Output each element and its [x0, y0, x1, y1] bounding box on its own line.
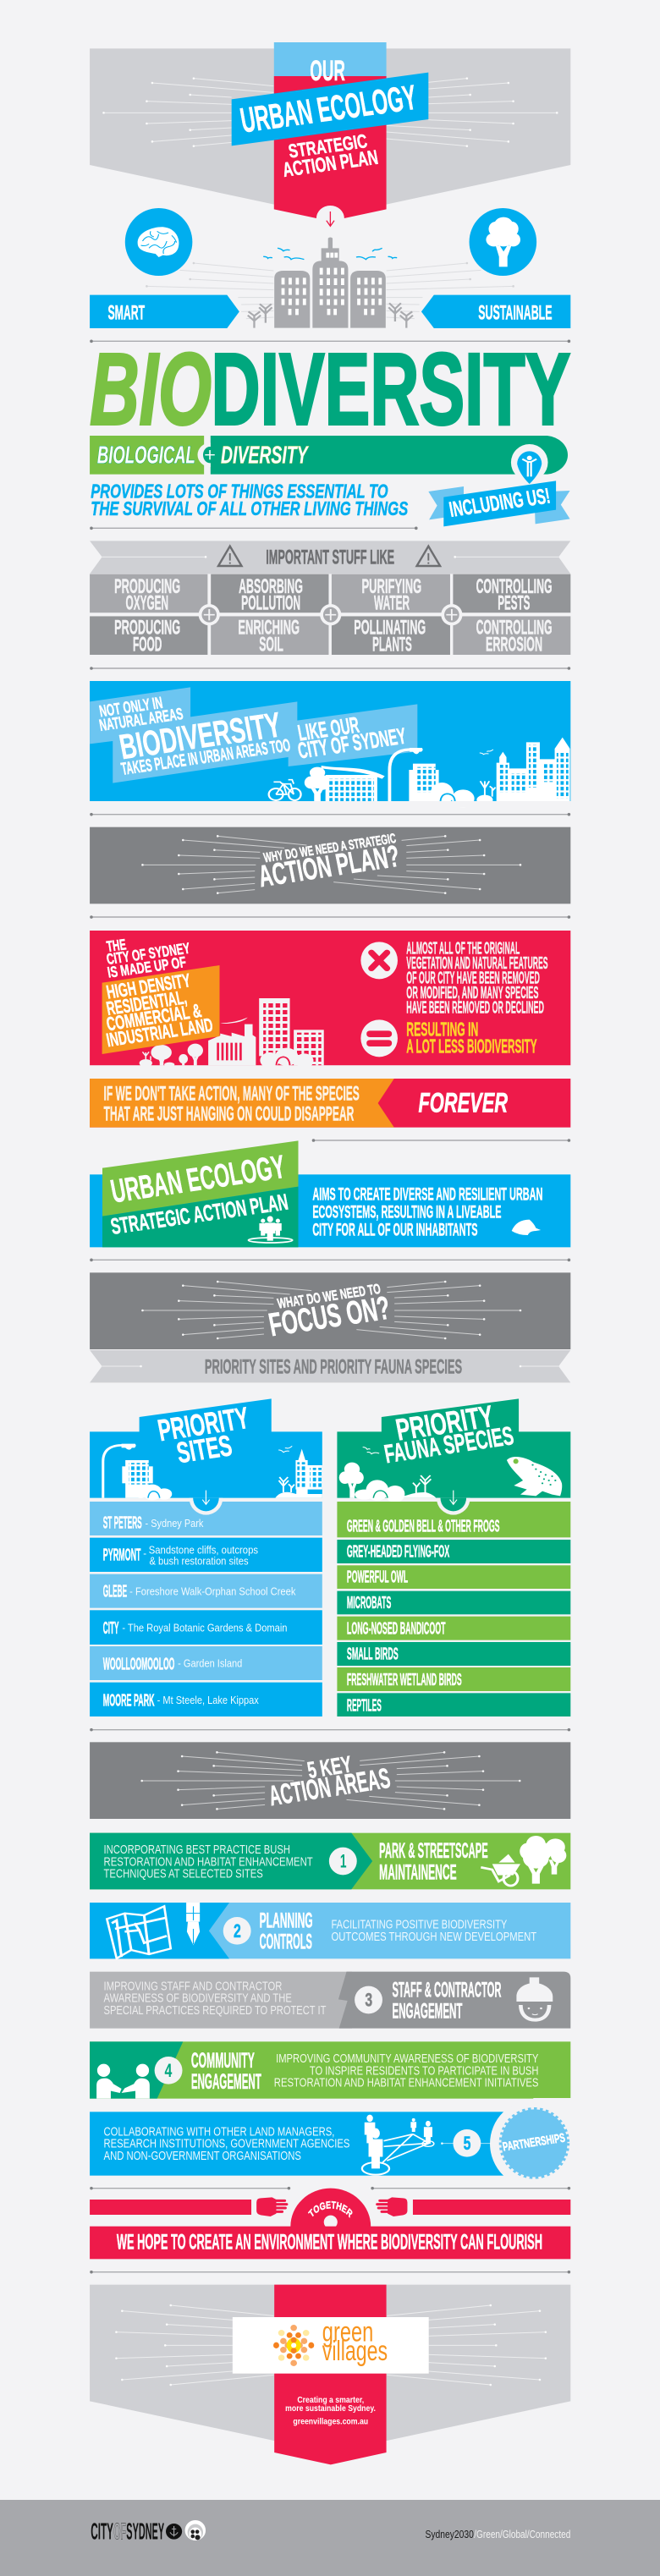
action 1: park and streetscape maintainence [90, 1833, 570, 1889]
panel: why do we need a strategic action plan [90, 827, 570, 904]
arch: together: TOGETHER [308, 2201, 352, 2218]
logo text: green villages: villages [322, 2335, 388, 2366]
text: what do we need to: WHAT DO WE NEED TO [276, 1281, 382, 1311]
title: MAINTAINENCE [379, 1859, 457, 1884]
teal block: STRATEGIC ACTION PLAN [109, 1189, 290, 1239]
text: the city of sydney is made up of: CITY OF SYDNEY [105, 940, 191, 969]
action 2: planning controls [90, 1903, 570, 1958]
grid: benefits [90, 574, 570, 656]
text: almost all of the original [406, 939, 548, 1017]
fauna rows: FRESHWATER WETLAND BIRDS [347, 1670, 462, 1689]
panel: priority sites [90, 1398, 322, 1716]
icon: bicycle wheels [269, 788, 301, 800]
text: the city of sydney is made up of: IS MADE UP OF [106, 953, 188, 981]
text: aims [312, 1184, 542, 1239]
panel: why do we need a strategic action plan: ACTION PLAN? [256, 839, 403, 894]
plus connectors [199, 604, 463, 625]
text: like our city of sydney: LIKE OUR [296, 712, 361, 746]
description: IMPROVING STAFF AND CONTRACTOR [104, 1980, 282, 1993]
title: ENGAGEMENT [392, 1998, 463, 2023]
ribbon: including us: INCLUDING US! [447, 483, 552, 521]
site rows: & bush restoration sites [149, 1555, 249, 1567]
rays [116, 2305, 546, 2385]
description: COLLABORATING WITH OTHER LAND MANAGERS, [104, 2125, 334, 2139]
starburst badge [501, 2109, 567, 2177]
action 2: planning controls: PLANNING [260, 1908, 313, 1932]
description [274, 2052, 539, 2090]
number 2 [223, 1917, 251, 1945]
action 4: community engagement: COMMUNITY [191, 2048, 255, 2073]
description: TECHNIQUES AT SELECTED SITES [104, 1868, 263, 1881]
fauna rows [337, 1502, 570, 1716]
description: INCORPORATING BEST PRACTICE BUSH [104, 1843, 290, 1857]
grid: benefits: CONTROLLING [476, 615, 552, 639]
title: action plan: ACTION PLAN [281, 146, 380, 182]
grid: benefits: POLLINATING [354, 615, 426, 639]
title: priority fauna species [382, 1400, 516, 1469]
action 3: staff and contractor engagement [90, 1972, 570, 2029]
text: the city of sydney is made up of [105, 936, 191, 981]
title: priority sites [155, 1401, 252, 1469]
fauna rows: POWERFUL OWL [347, 1568, 408, 1586]
description: OUTCOMES THROUGH NEW DEVELOPMENT [332, 1931, 536, 1944]
fauna rows: SMALL BIRDS [347, 1645, 399, 1663]
banner: important stuff like [90, 541, 570, 574]
description [332, 1919, 536, 1944]
icon: brain [125, 208, 192, 276]
title: priority fauna species: FAUNA SPECIES [382, 1420, 516, 1469]
orange ribbon: land use: RESIDENTIAL, [105, 987, 189, 1019]
site rows: - Foreshore Walk-Orphan School Creek [129, 1586, 296, 1597]
site rows: ST PETERS [103, 1513, 142, 1532]
icon: person pin [511, 444, 548, 484]
site rows: - Mt Steele, Lake Kippax [157, 1694, 259, 1706]
banner: sustainable [421, 295, 570, 328]
light blue tab [274, 42, 387, 93]
icon: map [107, 1906, 171, 1958]
description: AWARENESS OF BIODIVERSITY AND THE [104, 1992, 292, 2005]
text: focus on: FOCUS ON? [266, 1288, 393, 1343]
site rows: CITY [103, 1618, 119, 1638]
banner: smart [90, 295, 239, 328]
description [104, 1843, 313, 1881]
logo: green villages mark [273, 2325, 314, 2366]
blue band [90, 1174, 570, 1247]
action 4: community engagement: ENGAGEMENT [191, 2069, 261, 2094]
site rows: - Garden Island [178, 1658, 242, 1669]
header shape [90, 1398, 322, 1498]
description: IMPROVING COMMUNITY AWARENESS OF BIODIVERSITY [276, 2052, 539, 2066]
description: FACILITATING POSITIVE BIODIVERSITY [332, 1919, 508, 1931]
number 5 [442, 2129, 491, 2157]
icon: equals [360, 1019, 398, 1057]
site rows: MOORE PARK [103, 1691, 155, 1710]
footer logos and tagline: SYDNEY [126, 2519, 164, 2545]
site rows: - The Royal Botanic Gardens & Domain [122, 1623, 287, 1634]
panel: urban biodiversity: TAKES PLACE IN URBAN AREAS TOO [119, 735, 292, 779]
grid: benefits: PESTS [498, 590, 530, 614]
grid: benefits: PURIFYING [361, 574, 421, 598]
grid: benefits: ERROSION [486, 632, 542, 656]
number 4: 4 [164, 2061, 173, 2082]
description: SPECIAL PRACTICES REQUIRED TO PROTECT IT [104, 2004, 327, 2018]
grid: benefits: OXYGEN [126, 590, 168, 614]
header rays [104, 79, 557, 146]
header shape [337, 1398, 570, 1498]
logo: sydney 2030 badge [185, 2520, 206, 2540]
site rows [90, 1502, 322, 1716]
header: our urban ecology strategic action plan: OUR [310, 54, 345, 86]
green ribbon [102, 1140, 298, 1217]
icon: leaf [512, 1220, 541, 1235]
red pennant [274, 76, 387, 218]
orange ribbon: land use: HIGH DENSITY [105, 970, 192, 1003]
band: biological [90, 436, 204, 475]
starburst badge: PARTNERSHIPS [502, 2131, 566, 2154]
banner: we hope to create [90, 2227, 570, 2259]
number 2: 2 [234, 1921, 241, 1942]
banner: priority sites and priority fauna species [90, 1350, 570, 1382]
section: priorities [90, 1398, 570, 1716]
section: 5 key action areas [90, 1730, 570, 2029]
light ribbons [90, 687, 417, 783]
grid: benefits: PRODUCING [114, 574, 180, 598]
logo: city of sydney: OF [113, 2519, 126, 2545]
action 5: partnerships [90, 2098, 579, 2189]
city rays [146, 263, 514, 319]
icon: frog [507, 1457, 562, 1496]
arrow notch [190, 1491, 223, 1515]
description: TO INSPIRE RESIDENTS TO PARTICIPATE IN BUSH [310, 2064, 538, 2078]
orange ribbon: land use [102, 965, 220, 1054]
grey header banner [90, 48, 570, 205]
title [392, 1977, 502, 2023]
action 4: community engagement [90, 2041, 570, 2099]
skyline illustration [305, 738, 570, 808]
title: priority fauna species: PRIORITY [393, 1400, 497, 1447]
heading: bio: BIO [90, 332, 212, 447]
title [260, 1908, 313, 1953]
blue background [90, 681, 570, 801]
number 3 [355, 1986, 382, 2013]
band: diversity [211, 436, 568, 475]
header: our urban ecology strategic action plan [90, 42, 570, 328]
red pennant [274, 2285, 387, 2464]
orange ribbon: land use: COMMERCIAL & [105, 1000, 203, 1035]
panel: 5 key action areas heading: 5 KEY [305, 1751, 355, 1783]
description: AND NON-GOVERNMENT ORGANISATIONS [104, 2150, 301, 2163]
icon: people network [362, 2115, 434, 2175]
icon: birds [263, 248, 397, 260]
text: creating a smarter: Creating a smarter, [297, 2396, 364, 2405]
section: why an action plan is needed [90, 931, 570, 1128]
text: biodiversity: BIODIVERSITY [117, 706, 284, 766]
grid: benefits: CONTROLLING [476, 574, 552, 598]
icon: people [249, 1216, 293, 1243]
grid: benefits: SOIL [259, 632, 283, 656]
icon: bicycle [273, 780, 294, 794]
ribbon: including us [428, 481, 570, 526]
text: not only in natural areas: NOT ONLY IN [98, 694, 164, 721]
icon: city buildings [274, 237, 386, 328]
tagline: /Green/Global/Connected [474, 2529, 570, 2540]
banner: smart: SMART [107, 302, 145, 324]
icon: cross [360, 942, 398, 979]
banner: important stuff like: IMPORTANT STUFF LIKE [266, 545, 394, 568]
rays [142, 1282, 520, 1338]
number 1 [329, 1848, 357, 1875]
teal block [102, 1187, 298, 1247]
description: RESTORATION AND HABITAT ENHANCEMENT INITIATIVES [274, 2077, 538, 2090]
fauna rows: LONG-NOSED BANDICOOT [347, 1619, 446, 1638]
grey panel [90, 1272, 570, 1349]
icon: hands [256, 2197, 407, 2216]
illustration: city and industry [140, 998, 324, 1068]
arch: together [290, 2188, 371, 2227]
icon: pen [184, 1903, 201, 1945]
text: creating a smarter: greenvillages.com.au [293, 2417, 368, 2426]
site rows: - Sydney Park [146, 1518, 204, 1530]
action 1: park and streetscape maintainence: PARK & STREETSCAPE [379, 1838, 488, 1863]
text: provides lots [91, 481, 408, 520]
grey banner [90, 2285, 570, 2441]
text: not only in natural areas: NATURAL AREAS [98, 705, 184, 735]
footer logos and tagline [91, 2519, 570, 2545]
band: biological: BIOLOGICAL [97, 441, 195, 469]
text: provides lots: PROVIDES LOTS OF THINGS ESSENTIAL TO [91, 481, 388, 503]
footer banner: green villages [90, 2285, 570, 2464]
band: diversity: DIVERSITY [221, 441, 309, 469]
site rows: GLEBE [103, 1582, 127, 1601]
description: RESEARCH INSTITUTIONS, GOVERNMENT AGENCIES [104, 2138, 349, 2150]
icon: handshake [96, 2064, 150, 2099]
site rows: PYRMONT [103, 1546, 141, 1564]
banner: forever [90, 1079, 570, 1128]
text: provides lots: THE SURVIVAL OF ALL OTHER LIVING THINGS [91, 498, 408, 520]
orange ribbon: land use: INDUSTRIAL LAND [105, 1014, 215, 1052]
description [104, 1980, 327, 2018]
grid: benefits: POLLUTION [241, 590, 300, 614]
grid: benefits: ABSORBING [239, 574, 303, 598]
logo: city of sydney: CITY [91, 2519, 113, 2545]
text: the city of sydney is made up of: THE [106, 936, 128, 956]
text: creating a smarter [285, 2396, 376, 2426]
footer bar [0, 2500, 660, 2576]
panel: urban ecology strategic action plan [90, 1140, 570, 1260]
site rows: Sandstone cliffs, outcrops [149, 1544, 258, 1556]
logo: city of sydney [91, 2519, 182, 2545]
site rows: WOOLLOOMOOLOO [103, 1655, 174, 1673]
logo text: green villages: green [322, 2316, 373, 2348]
title: priority sites: SITES [174, 1429, 234, 1469]
panel: 5 key action areas heading: ACTION AREAS [266, 1762, 393, 1812]
text: like our city of sydney [296, 712, 408, 764]
icon: tree [470, 208, 536, 276]
title [379, 1838, 488, 1884]
panel: urban biodiversity [90, 668, 570, 917]
action 2: planning controls: CONTROLS [260, 1929, 312, 1953]
number 3: 3 [365, 1991, 372, 2011]
number 5: 5 [464, 2134, 470, 2155]
description: RESTORATION AND HABITAT ENHANCEMENT [104, 1855, 313, 1869]
green ribbon: URBAN ECOLOGY [107, 1148, 289, 1210]
tagline: Sydney2030 [425, 2529, 474, 2540]
arrow down [327, 211, 334, 226]
title: strategic: STRATEGIC [287, 131, 369, 162]
text: creating a smarter: more sustainable Sydney. [285, 2404, 376, 2414]
number 4 [155, 2057, 183, 2084]
icon: hard hat [516, 1977, 553, 2020]
grid: benefits: ENRICHING [238, 615, 300, 639]
banner: forever: FOREVER [418, 1088, 508, 1118]
tagline [425, 2529, 570, 2540]
text: not only in natural areas [98, 694, 184, 735]
site rows: - [143, 1547, 146, 1559]
fauna rows: MICROBATS [347, 1593, 391, 1612]
banner: sustainable: SUSTAINABLE [478, 302, 552, 324]
text: like our city of sydney: CITY OF SYDNEY [296, 723, 408, 764]
red panel [90, 931, 570, 1065]
fauna rows: GREY-HEADED FLYING-FOX [347, 1542, 449, 1561]
grid: benefits: PLANTS [372, 632, 412, 656]
text: resulting in a lot less biodiversity [406, 1019, 537, 1057]
section: action areas 4 and 5, together [90, 2041, 570, 2274]
panel: priority fauna species [337, 1398, 570, 1716]
red arms [90, 2200, 570, 2215]
icon: wheelbarrow and trees [481, 1836, 566, 1886]
grid: benefits: PRODUCING [114, 615, 180, 639]
fauna rows: REPTILES [347, 1696, 382, 1715]
title [191, 2048, 261, 2094]
illustration: street and towers [103, 1444, 322, 1500]
plus sign [197, 442, 217, 467]
panel: why do we need a strategic action plan: WHY DO WE NEED A STRATEGIC [262, 830, 398, 865]
title: priority sites: PRIORITY [155, 1401, 252, 1448]
section: what do we need to focus on [90, 1272, 570, 1382]
number 1: 1 [340, 1852, 347, 1872]
grid: benefits: WATER [374, 590, 410, 614]
grid: benefits: FOOD [133, 632, 162, 656]
blue ribbon [232, 73, 428, 146]
white logo box [233, 2317, 429, 2374]
arrow notch [437, 1491, 470, 1515]
icon: small plants [248, 303, 413, 328]
text: resulting in a lot less biodiversity: RESULTING IN [406, 1019, 478, 1041]
illustration: trees and plants [339, 1447, 437, 1502]
description [104, 2125, 349, 2163]
section: biodiversity definition [90, 332, 570, 656]
title: urban ecology: URBAN ECOLOGY [238, 79, 420, 140]
logo text: green villages [322, 2316, 388, 2366]
panel: 5 key action areas heading [90, 1742, 570, 1819]
